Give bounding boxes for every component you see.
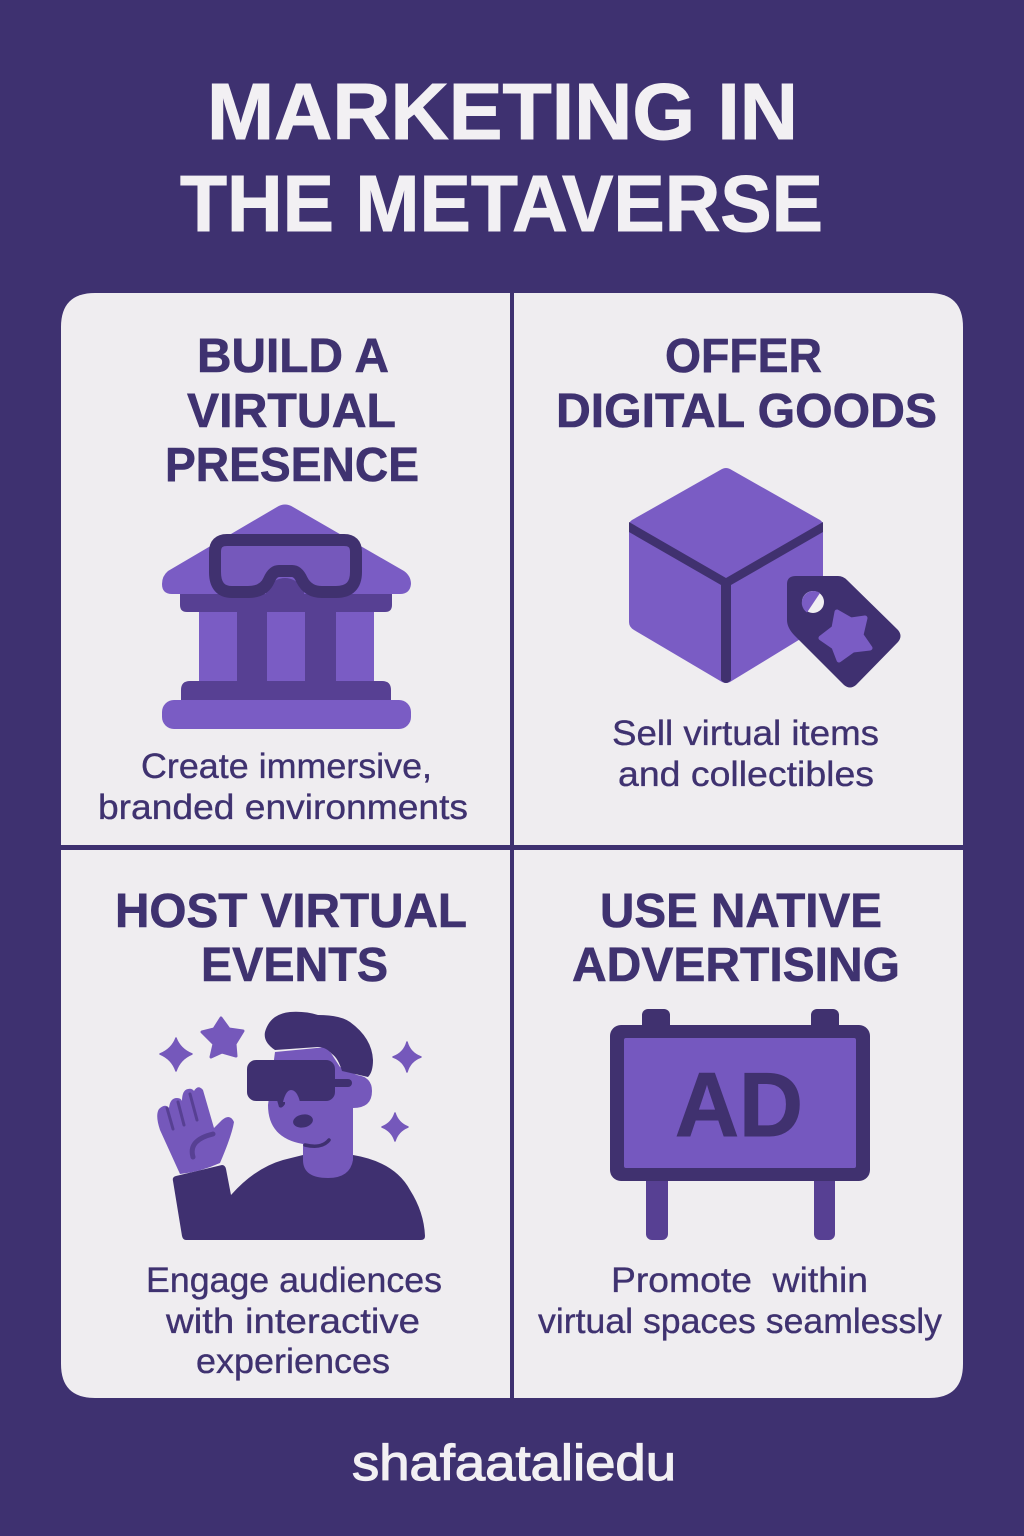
description: host virtual events: Engage audiences (146, 1261, 442, 1300)
heading: use native advertising: USE NATIVE (600, 885, 882, 938)
heading: host virtual events (115, 885, 467, 992)
description: host virtual events: experiences (196, 1342, 390, 1381)
description: host virtual events (146, 1261, 442, 1381)
heading: offer digital goods: OFFER (665, 330, 822, 383)
heading: build a virtual presence: VIRTUAL (187, 385, 396, 438)
heading: host virtual events: HOST VIRTUAL (115, 885, 467, 938)
footer brand: shafaataliedu (352, 1435, 676, 1491)
panel: use native advertising (514, 850, 963, 1398)
icon: cube with star price tag (629, 468, 900, 688)
title: MARKETING IN (207, 67, 798, 156)
panel: offer digital goods (514, 293, 963, 845)
heading: host virtual events: EVENTS (201, 939, 388, 992)
panel: host virtual events (61, 850, 510, 1398)
icon: AD billboard (610, 1009, 870, 1240)
description: use native advertising (538, 1261, 943, 1341)
panel: build a virtual presence (61, 293, 510, 845)
description: offer digital goods: and collectibles (618, 755, 874, 794)
icon: AD billboard: AD (675, 1055, 803, 1156)
heading: offer digital goods (556, 330, 937, 438)
description: use native advertising: Promote within (611, 1261, 868, 1300)
title (180, 67, 823, 248)
heading: build a virtual presence (165, 330, 419, 492)
description: use native advertising: virtual spaces seamlessly (538, 1302, 943, 1341)
title: THE METAVERSE (180, 159, 823, 248)
description: host virtual events: with interactive (165, 1302, 420, 1341)
heading: offer digital goods: DIGITAL GOODS (556, 385, 937, 438)
icon: building with VR goggles (162, 504, 411, 729)
description: build a virtual presence (98, 747, 468, 827)
heading: build a virtual presence: PRESENCE (165, 439, 419, 492)
description: offer digital goods (612, 714, 879, 794)
description: build a virtual presence: branded environments (98, 788, 468, 827)
description: build a virtual presence: Create immersive, (141, 747, 432, 786)
heading: use native advertising: ADVERTISING (572, 939, 900, 992)
heading: build a virtual presence: BUILD A (197, 330, 389, 383)
icon: person in VR headset waving (157, 1012, 425, 1240)
heading: use native advertising (572, 885, 900, 992)
description: offer digital goods: Sell virtual items (612, 714, 879, 753)
